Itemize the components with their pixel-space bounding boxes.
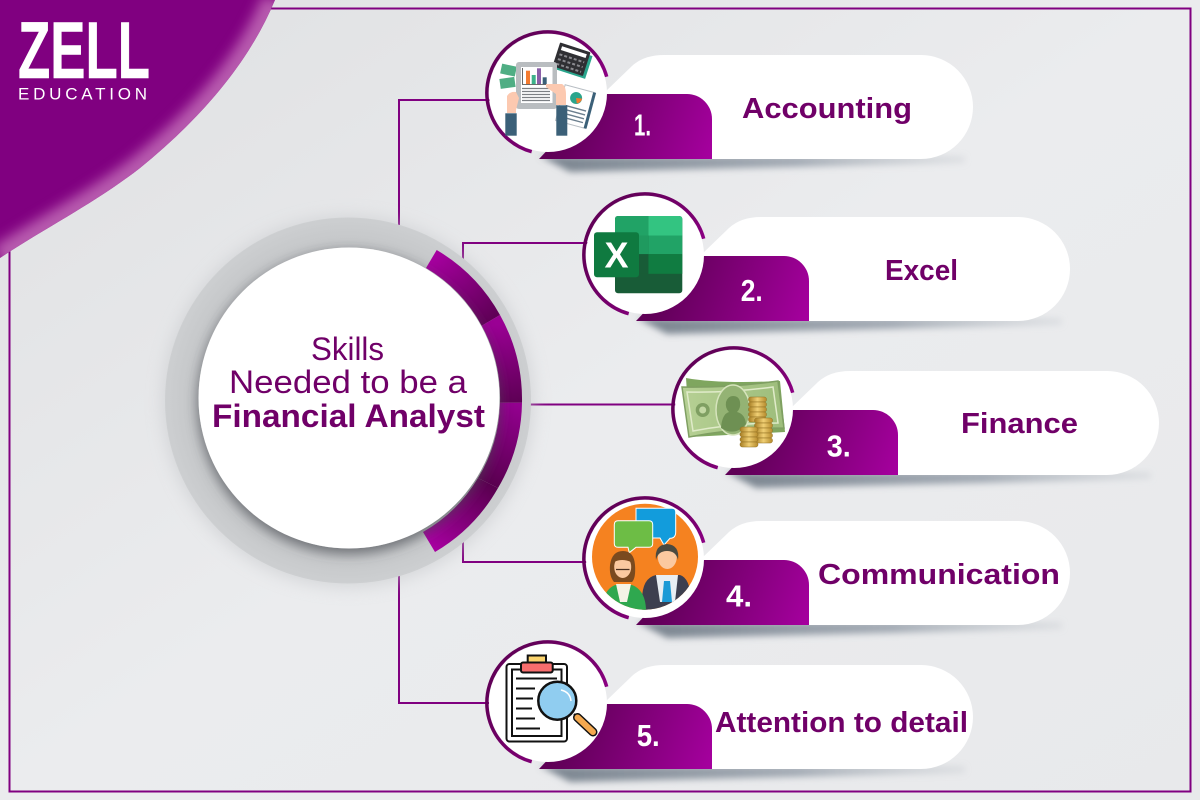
step number 3: 3. [827, 429, 851, 464]
label: Excel: Excel [885, 255, 958, 287]
step number 1: 1. [634, 108, 651, 143]
icon: Excel [594, 216, 682, 293]
card 1: Accounting [487, 32, 973, 172]
label: Finance: Finance [961, 408, 1078, 440]
white centre disc [198, 248, 500, 548]
card 4: Communication [584, 498, 1070, 638]
step number 5: 5. [637, 718, 660, 753]
connector lines [399, 100, 676, 703]
icon: Excel: X [604, 234, 629, 276]
central hub [162, 216, 534, 588]
card 5: Attention to detail [487, 642, 973, 782]
outer grey ring [165, 218, 531, 584]
card 3: Finance [673, 348, 1159, 488]
hub title: Financial Analyst [212, 398, 485, 434]
logo: ZELL: ZELL [18, 6, 150, 96]
icon: clipboard and magnifier [506, 656, 593, 742]
hub title [212, 331, 485, 434]
hub title: Needed to be a [229, 364, 467, 400]
icon: accounting [499, 42, 596, 136]
logo: EDUCATION: EDUCATION [18, 84, 147, 104]
icon: two people talking [592, 504, 698, 615]
icon: money [682, 378, 785, 447]
corner banner with logo [0, 0, 275, 258]
step number 4: 4. [726, 579, 752, 614]
hub title: Skills [311, 331, 384, 367]
card 2: Excel [584, 194, 1070, 334]
label: Communication: Communication [818, 559, 1060, 591]
soft ring glow [162, 216, 534, 588]
purple arc segments [423, 250, 522, 552]
step number 2: 2. [741, 273, 763, 308]
label: Attention to detail: Attention to detail [715, 707, 968, 739]
label: Accounting: Accounting [742, 93, 912, 125]
